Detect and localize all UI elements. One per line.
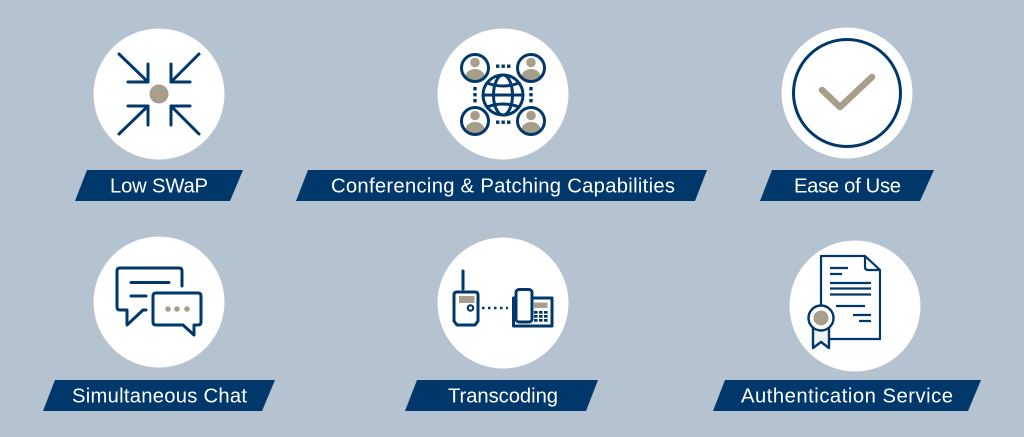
document text lines (830, 268, 871, 321)
label: Authentication Service (713, 380, 981, 411)
icon: person bottom right (518, 108, 544, 135)
icon: radio linked to desk phone (438, 238, 568, 368)
panel: Simultaneous Chat (43, 236, 275, 411)
panel: Low SWaP (75, 28, 243, 201)
label: Conferencing & Patching Capabilities (296, 170, 707, 201)
icon: person top right (518, 54, 544, 82)
document (821, 256, 880, 339)
label: Ease of Use (760, 170, 934, 201)
panel: Conferencing & Patching Capabilities (296, 28, 707, 201)
label: Low SWaP (75, 170, 243, 201)
panel: Authentication Service (713, 240, 981, 411)
label: Authentication Service: Authentication Service (741, 386, 953, 408)
icon: check mark in ring (782, 28, 912, 158)
icon: chat bubbles (94, 236, 224, 368)
dotted link (482, 307, 508, 309)
icon: person top left (462, 54, 488, 82)
label: Simultaneous Chat (43, 380, 275, 411)
icon: handheld radio (454, 271, 478, 325)
panel: Transcoding (405, 238, 598, 411)
label: Transcoding (405, 380, 598, 411)
icon: people connected by globe (438, 28, 568, 160)
label: Transcoding: Transcoding (448, 386, 558, 408)
icon: ribbon seal (808, 306, 834, 348)
label: Conferencing & Patching Capabilities: Conferencing & Patching Capabilities (331, 176, 675, 198)
label: Ease of Use: Ease of Use (794, 176, 901, 198)
panel: Ease of Use (760, 28, 934, 201)
connector dots (473, 64, 533, 124)
icon: desk phone (514, 290, 552, 326)
icon: certificate with seal (790, 240, 920, 372)
icon: globe (483, 75, 523, 115)
label: Simultaneous Chat: Simultaneous Chat (72, 386, 247, 408)
icon: converging arrows (94, 28, 224, 160)
icon: person bottom left (462, 108, 488, 135)
label: Low SWaP: Low SWaP (110, 176, 208, 198)
